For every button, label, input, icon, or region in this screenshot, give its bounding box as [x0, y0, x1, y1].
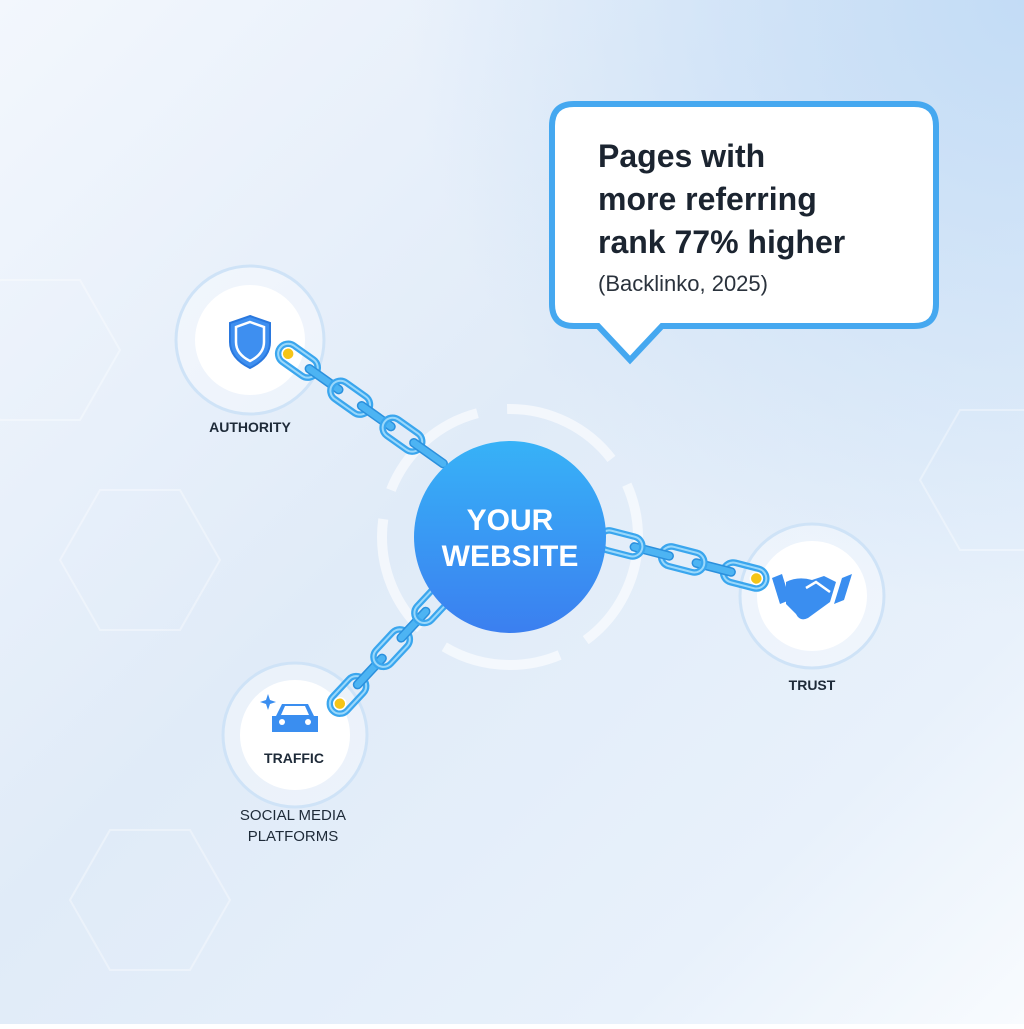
label: social media platforms	[240, 807, 346, 845]
node: traffic	[223, 663, 367, 807]
node: authority: AUTHORITY	[209, 419, 291, 435]
callout	[552, 104, 936, 360]
center rings	[382, 409, 638, 665]
icon: shield	[230, 316, 270, 368]
chain: authority	[274, 340, 452, 474]
callout: (Backlinko, 2025)	[598, 271, 768, 296]
callout: Pages with	[598, 138, 765, 174]
node: authority	[176, 266, 324, 435]
icon: car	[260, 694, 318, 732]
node: trust: TRUST	[789, 677, 836, 693]
callout: more referring	[598, 181, 817, 217]
chain: trust	[597, 528, 769, 591]
node: trust	[740, 524, 884, 693]
label: social media platforms: PLATFORMS	[248, 828, 338, 845]
chain: traffic	[326, 581, 455, 718]
icon: handshake	[772, 574, 852, 619]
center: your website: WEBSITE	[442, 540, 578, 573]
callout: rank 77% higher	[598, 224, 845, 260]
label: social media platforms: SOCIAL MEDIA	[240, 807, 346, 824]
node: traffic: TRAFFIC	[264, 750, 324, 766]
center: your website	[414, 441, 606, 633]
center: your website: YOUR	[467, 504, 554, 537]
